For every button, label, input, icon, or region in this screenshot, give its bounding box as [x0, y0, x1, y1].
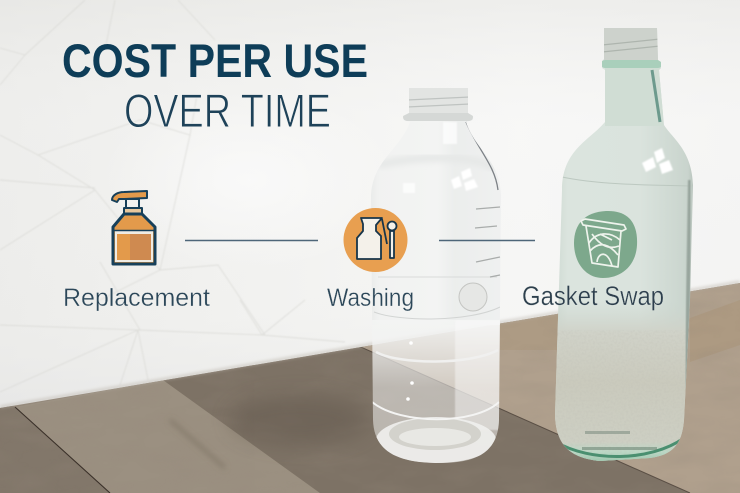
plank dark: [163, 340, 690, 493]
label: Gasket Swap: Gasket Swap: [522, 281, 664, 311]
connector line 2: [439, 240, 535, 242]
plank tan: [345, 283, 740, 493]
clear glass bottle: [371, 88, 500, 463]
connector line 1: [185, 240, 318, 242]
icon: pump bottle (replacement): [112, 191, 155, 264]
label: Replacement: Replacement: [63, 284, 210, 312]
title line: COST PER USE: COST PER USE: [62, 34, 368, 87]
wall geometric line pattern: [0, 0, 345, 392]
plank far left: [0, 400, 110, 493]
green glass bottle: [550, 25, 700, 465]
subtitle: OVER TIME: OVER TIME: [124, 84, 331, 137]
plank light: [15, 380, 320, 493]
icon: gasket swap: [574, 211, 637, 278]
wooden table: [0, 280, 740, 493]
soft table edge: [0, 282, 740, 407]
label: Washing: Washing: [327, 284, 414, 312]
icon: washing: [344, 208, 408, 272]
